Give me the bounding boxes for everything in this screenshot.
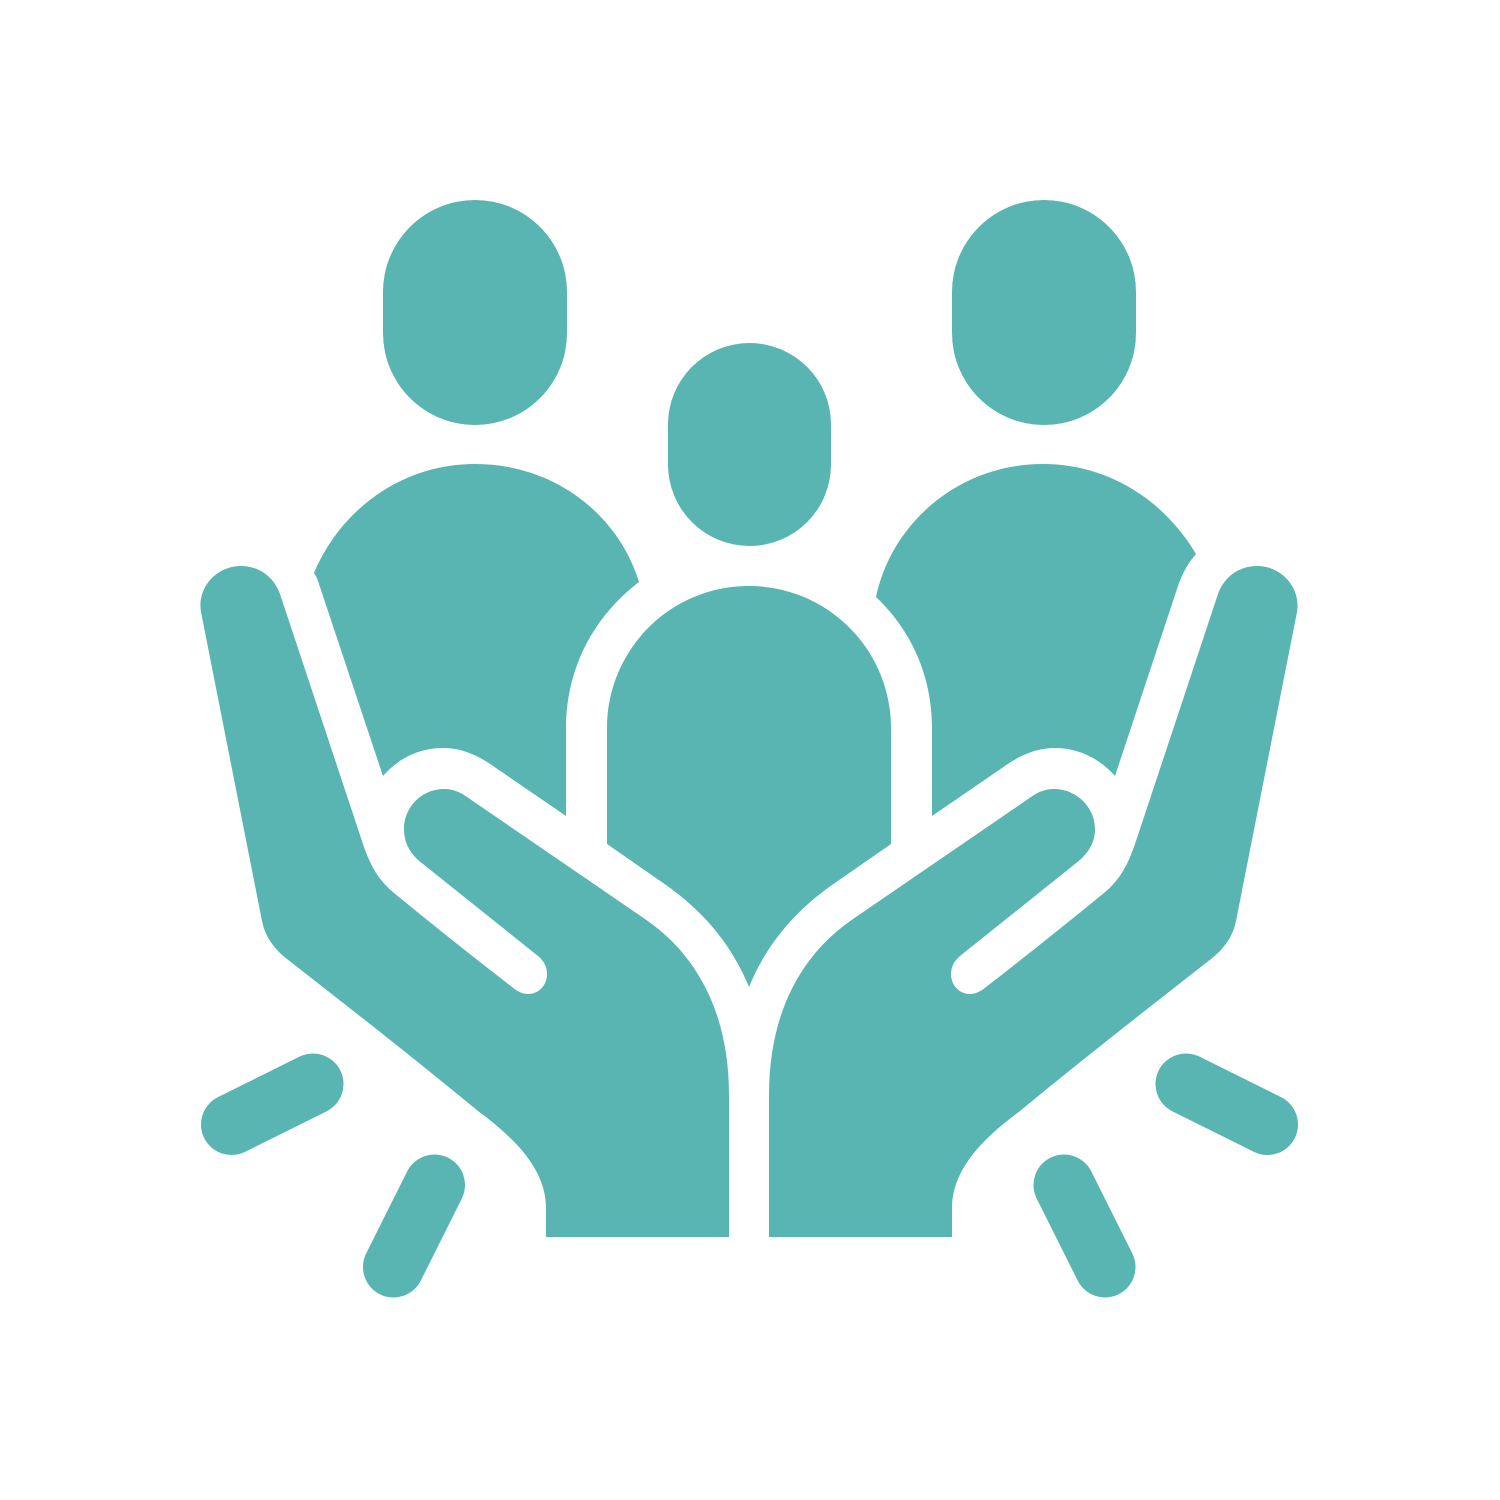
- left inner spark: [394, 1185, 434, 1267]
- left person: [314, 200, 639, 816]
- right person: [876, 200, 1196, 816]
- right inner spark: [1064, 1185, 1105, 1267]
- right hand: [769, 566, 1298, 1237]
- right outer spark: [1186, 1084, 1268, 1124]
- left hand: [200, 566, 729, 1237]
- left outer spark: [232, 1084, 313, 1124]
- center person: [607, 343, 891, 987]
